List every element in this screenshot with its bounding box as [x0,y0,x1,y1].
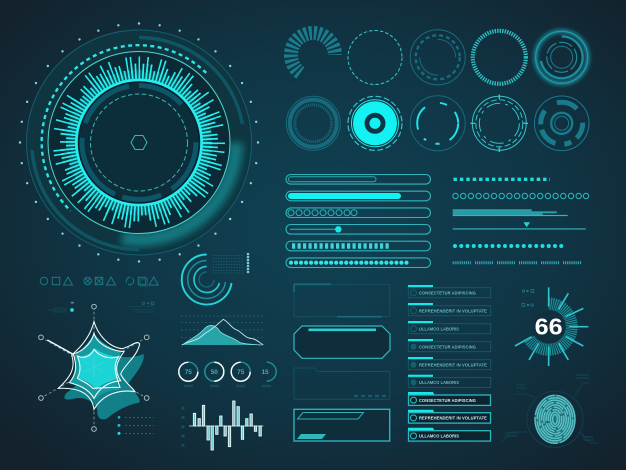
center hexagon [131,136,147,150]
donut gauges [179,362,276,386]
filled area dark [182,321,263,345]
dim labels [408,285,491,387]
glow behind burst [73,76,205,208]
thick dim ring circle [286,96,340,150]
outer arc bands [32,37,242,250]
bright core [77,348,118,390]
label 5: REPREHENDERIT IN VOLUPTATE [419,362,487,367]
stepped bars [453,209,568,216]
faint labels [184,385,271,387]
donut 50: 50 [211,369,218,376]
donut 15: 15 [261,369,269,376]
fingerprint whorls [535,395,575,443]
solid fill bar [288,193,401,199]
axes [41,307,147,429]
segment bar [292,243,391,249]
small marker right [128,302,154,312]
legend dots [117,416,120,435]
progress bars [286,174,430,268]
label 1: CONSECTETUR ADIPISCING [419,290,477,295]
dial small icons [522,290,534,306]
frames [294,284,390,441]
fingerprint connectors [501,375,598,447]
inner segmented band [82,86,196,200]
outlines [182,319,263,345]
guide lines [181,316,263,337]
outlined fill bar [288,177,376,182]
inner dashed ring [90,94,188,191]
filled area teal [182,325,263,345]
indicator rows [453,179,589,263]
core web [85,357,103,377]
center disc [78,82,200,203]
legend lines [125,417,154,433]
label 2: REPREHENDERIT IN VOLUPTATE [419,308,487,313]
tick circle [473,31,526,84]
broken arc circle [410,96,465,151]
slider [290,226,341,232]
label 8: REPREHENDERIT IN VOLUPTATE [419,416,487,420]
radial dial 66 [515,287,588,366]
frame 2 [294,326,390,358]
arcs [182,254,232,304]
label list [408,285,491,441]
dashed circle [348,30,402,84]
crescent glow [122,142,236,240]
area chart [181,316,263,345]
ring beads row [453,193,589,199]
outer disc [26,30,252,255]
dot ring [20,24,258,262]
label 7: CONSECTETUR ADIPISCING [419,398,477,403]
concentric arcs chart [182,254,248,304]
segmented dim circle [534,96,589,151]
dot bar [291,261,411,265]
donut 75: 75 [185,369,192,376]
main radial gauge [20,24,258,262]
circle row 2 [286,94,589,152]
mid blob [70,333,122,400]
small marker left [48,303,74,312]
dot grid [213,256,243,273]
label 9: ULLAMCO LABORIS [419,434,459,438]
shape icons [40,277,158,286]
dots row [455,244,562,248]
waveform chart [183,401,263,450]
donut 75 second: 75 [237,369,245,376]
frame 3 [294,368,390,399]
bar outlines [286,174,430,268]
bars [193,401,261,450]
glowing ring circle [536,31,588,83]
baseline [189,425,263,427]
label 4: CONSECTETUR ADIPISCING [419,344,477,349]
bright labels [408,392,490,441]
crosshair circle [470,94,528,152]
frame 4 [294,409,390,441]
label 3: ULLAMCO LABORIS [419,326,459,331]
dial spikes [515,287,588,366]
fan dial [291,33,335,73]
dial value: 66 [535,314,563,340]
white outlines [47,322,140,409]
inner disc [48,52,230,234]
bright filled circle [348,96,402,150]
bead column [247,254,249,273]
dial small bars [529,304,572,350]
tick groups [453,261,582,264]
ring beads [288,210,357,216]
dial center [533,311,565,343]
axis nodes [39,304,149,431]
label 6: ULLAMCO LABORIS [419,380,459,385]
bright dashed arc [42,45,206,211]
fingerprint [501,375,598,447]
circle row 1 [291,30,588,85]
radar chart [39,302,154,435]
side dots [178,407,187,447]
slider line with marker [453,222,586,229]
beaded circle [410,30,465,85]
teal blob [64,349,144,419]
radial burst [66,69,212,216]
squares row [454,178,550,181]
fingerprint base [534,395,576,444]
frame 1 [294,284,390,317]
